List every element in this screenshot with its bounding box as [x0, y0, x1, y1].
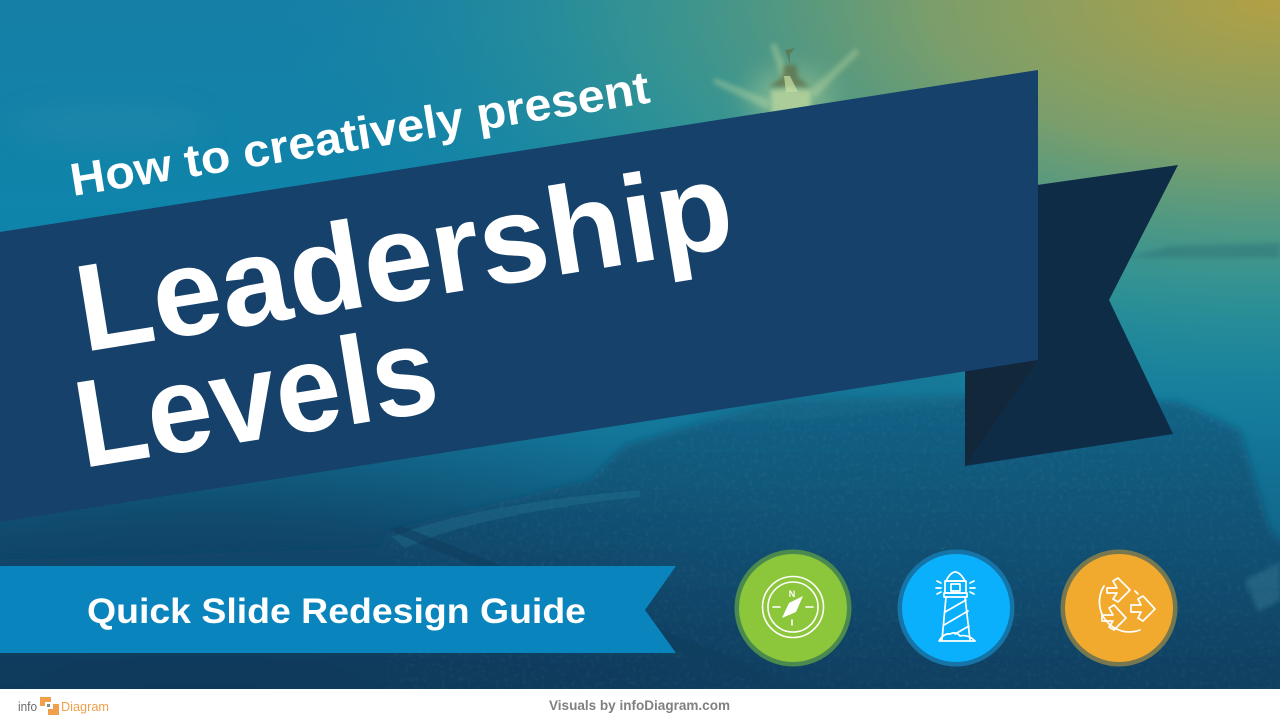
- lighthouse top with light rays: [713, 43, 859, 124]
- icon: compass: [734, 550, 852, 666]
- title: Leadership Levels: Levels: [65, 300, 447, 495]
- footer bar: [0, 689, 1280, 720]
- ribbon fold: [965, 360, 1038, 466]
- ribbon tail: [965, 165, 1178, 466]
- footer logo: [18, 697, 109, 715]
- subtitle banner: Quick Slide Redesign Guide: [87, 592, 586, 631]
- subtitle banner: [0, 566, 676, 653]
- title: Leadership Levels: [65, 137, 742, 495]
- footer logo: info: [18, 699, 37, 714]
- footer bar: Visuals by infoDiagram.com: [549, 698, 730, 713]
- title: Leadership Levels: Leadership: [66, 137, 742, 379]
- icon: arrows in circle: [1060, 550, 1178, 666]
- ribbon main band: [0, 70, 1038, 522]
- heading: how to creatively present: How to creatively present: [66, 61, 653, 206]
- icon: compass: N: [789, 589, 795, 599]
- footer logo: Diagram: [61, 699, 109, 714]
- icon: lighthouse: [898, 550, 1014, 666]
